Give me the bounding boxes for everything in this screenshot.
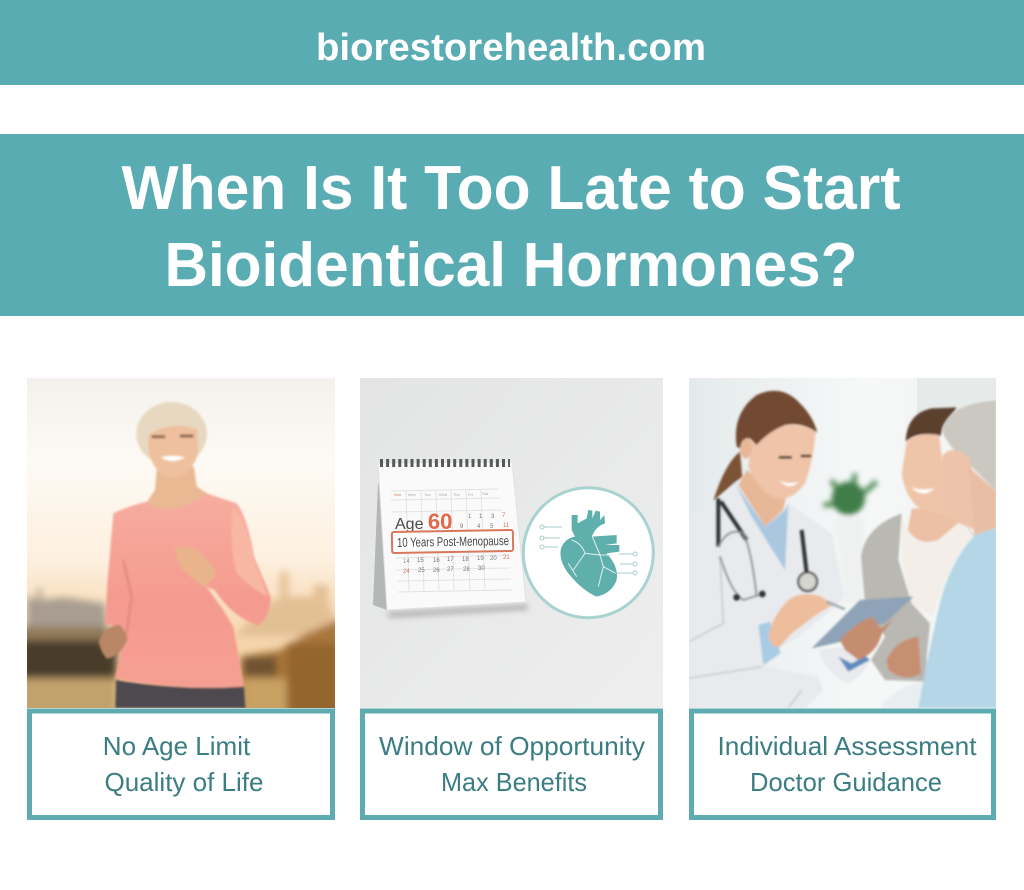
caption: individual assessment: Individual Assessment: [718, 731, 977, 761]
coat: [723, 480, 842, 707]
seated woman smile: [911, 487, 934, 494]
cuff right: [838, 656, 870, 672]
dates: 16: [433, 558, 440, 564]
holding hand: [840, 617, 895, 660]
dates: 20: [490, 556, 497, 562]
website banner: [0, 0, 1024, 85]
hair: [736, 391, 817, 448]
dates: 30: [478, 566, 485, 572]
caption: individual assessment: [692, 711, 994, 818]
caption: window of opportunity: Window of Opportunity: [379, 731, 645, 761]
photo: older woman jogging at sunset: [20, 378, 342, 715]
dates: 11: [503, 523, 510, 529]
website banner: biorestorehealth.com: [316, 27, 706, 69]
month header: Tue: [424, 492, 432, 497]
background plant and pot: [820, 470, 881, 520]
dates: 27: [447, 567, 454, 573]
title banner: Bioidentical Hormones?: [164, 231, 858, 300]
dates: 5: [490, 524, 494, 530]
panel: individual assessment: [688, 378, 997, 818]
hair: [136, 402, 207, 466]
dates: 1: [468, 514, 472, 520]
month header: Wed: [439, 492, 447, 497]
arm shadow: [123, 560, 132, 637]
grid: [391, 489, 512, 592]
tablet: [812, 597, 913, 648]
caption: window of opportunity: [362, 711, 660, 818]
caption: no age limit: Quality of Life: [105, 767, 263, 797]
coat shading: [688, 557, 802, 708]
dates: 21: [503, 555, 510, 561]
dates: 1: [479, 514, 483, 520]
heart callout markers: [540, 525, 637, 575]
caption: window of opportunity: Max Benefits: [441, 767, 587, 797]
doctor: [688, 391, 913, 708]
illustration: calendar and heart: [360, 378, 663, 708]
dates: 15: [417, 558, 424, 564]
photo: doctor with patients: [688, 378, 997, 708]
lower hand: [99, 625, 127, 659]
dates: 28: [463, 567, 470, 573]
writing hand: [768, 594, 832, 647]
dates: 4: [477, 524, 481, 530]
dates: 17: [447, 557, 454, 563]
face: [748, 425, 816, 499]
title banner: [0, 134, 1024, 316]
title banner: When Is It Too Late to Start: [122, 154, 900, 223]
blue shirt: [735, 483, 788, 570]
calendar: [378, 462, 526, 610]
face features: [152, 436, 193, 461]
pants: [115, 680, 245, 708]
caption: no age limit: No Age Limit: [103, 731, 251, 761]
stethoscope: [718, 498, 845, 609]
cuff blue: [758, 622, 781, 665]
icon: heart: [560, 510, 619, 597]
caption: individual assessment: Doctor Guidance: [750, 767, 942, 797]
calendar: 10 Years Post-Menopause: [397, 533, 509, 550]
panel: no age limit: [20, 378, 342, 818]
dates: 25: [418, 568, 425, 574]
dates: [403, 513, 510, 575]
dates: 3: [491, 514, 495, 520]
neck: [146, 467, 207, 510]
month header: Fri: [468, 492, 473, 497]
month header: Thu: [453, 492, 460, 497]
face: [148, 426, 198, 479]
post-menopause highlight: [392, 530, 513, 553]
month header: Mon: [408, 492, 416, 497]
dates: 19: [477, 556, 484, 562]
neck: [738, 470, 786, 527]
dates: 24: [403, 569, 410, 575]
month header: Sun: [394, 492, 401, 497]
sleeve: [818, 647, 870, 683]
spiral binding: [380, 459, 510, 467]
dates: 9: [460, 524, 464, 530]
sleeve highlight: [231, 507, 268, 597]
ponytail: [713, 452, 742, 501]
age 60: Age 60: [395, 509, 452, 534]
raised hand: [174, 547, 216, 587]
dates: 18: [462, 557, 469, 563]
month header: [394, 492, 488, 496]
dates: 8: [448, 524, 452, 530]
figure: [99, 402, 271, 708]
dates: 14: [403, 559, 410, 565]
older patient: [918, 401, 997, 708]
calendar back page: [373, 483, 387, 610]
calendar shadow: [386, 604, 528, 618]
caption: no age limit: [30, 711, 332, 818]
blurred background scenery: [20, 572, 342, 715]
dates: 7: [502, 513, 506, 519]
seated woman: [861, 407, 974, 708]
heart circle: [523, 488, 653, 618]
dates: 26: [433, 568, 440, 574]
panel: window of opportunity: [360, 378, 663, 818]
doctor face features: [779, 456, 811, 486]
shirt: [105, 493, 271, 688]
month header: Sat: [482, 491, 489, 496]
